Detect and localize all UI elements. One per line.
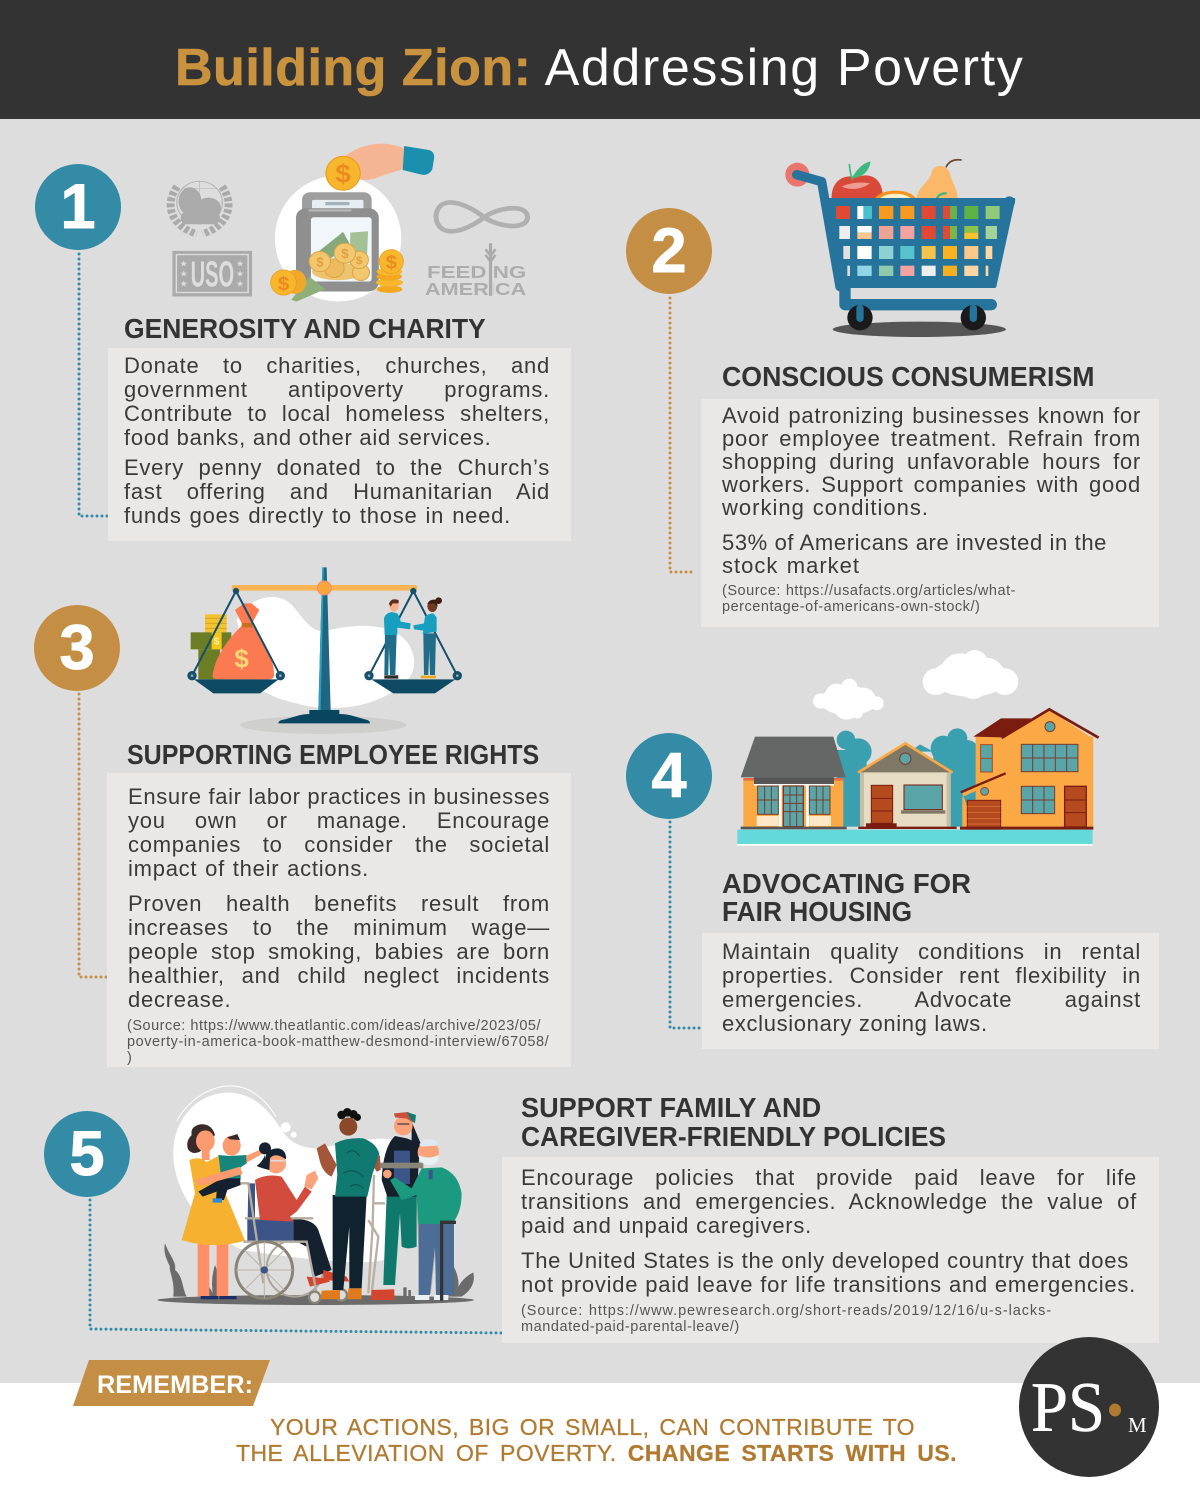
donation jar — [296, 192, 379, 292]
icon: USO logo: ★ — [180, 279, 188, 288]
scale beam — [232, 581, 417, 595]
text box 1 — [108, 348, 571, 541]
text box 1: Every penny donated to the Church’s — [124, 455, 550, 480]
icon: falling coin: $ — [335, 159, 351, 188]
text box 5: (Source: https://www.pewresearch.org/short-reads/2019/12/16/u-s-lacks- — [521, 1303, 1052, 1319]
text box 3: impact of their actions. — [128, 856, 369, 881]
logo: PS M: PS — [1031, 1369, 1105, 1447]
text box 3: ) — [127, 1050, 132, 1066]
text box 2: shopping during unfavorable hours for — [722, 449, 1141, 474]
right pan — [366, 588, 460, 693]
remember tag: REMEMBER: — [97, 1371, 253, 1399]
number badge 5 — [44, 1111, 130, 1197]
text box 3: poverty-in-america-book-matthew-desmond-interview/67058/ — [127, 1034, 549, 1050]
heading 2: CONSCIOUS CONSUMERISM — [722, 361, 1095, 392]
woman in wheelchair — [236, 1142, 349, 1303]
white blob — [237, 597, 414, 708]
header bar with title — [0, 0, 1200, 119]
text box 2: Avoid patronizing businesses known for — [722, 403, 1141, 428]
icon: feeding america logo: AMERICA — [425, 278, 526, 299]
coin stack and money: $ — [278, 273, 289, 295]
connector 1 — [78, 252, 108, 518]
text box 5: Encourage policies that provide paid leave for life — [521, 1165, 1137, 1190]
text box 2: 53% of Americans are invested in the — [722, 530, 1107, 555]
icon: USO logo — [172, 251, 252, 296]
text box 5: The United States is the only developed country that does — [521, 1248, 1129, 1273]
text box 2: poor employee treatment. Refrain from — [722, 426, 1141, 451]
text box 2: percentage-of-americans-own-stock/) — [722, 599, 980, 615]
text box 2 — [701, 399, 1159, 627]
text box 2: (Source: https://usafacts.org/articles/what- — [722, 583, 1016, 599]
text box 4: emergencies. Advocate against — [722, 987, 1141, 1012]
text box 1: Donate to charities, churches, and — [124, 353, 550, 378]
heading 5: SUPPORT FAMILY AND — [521, 1092, 821, 1123]
heading 4: ADVOCATING FOR — [722, 868, 971, 899]
text box 1: Contribute to local homeless shelters, — [124, 401, 550, 426]
panel 1: generosity and charity — [35, 144, 571, 541]
connector 2 — [668, 296, 692, 574]
remember tag — [73, 1360, 270, 1406]
footer band — [0, 1337, 1200, 1500]
house 2: cream — [858, 743, 957, 829]
heading 5 — [521, 1092, 946, 1152]
number badge 3 — [34, 605, 120, 691]
text box 3: Proven health benefits result from — [128, 891, 550, 916]
number badge 4 — [626, 733, 712, 819]
trees — [837, 728, 980, 827]
money bag — [213, 603, 274, 679]
text box 5: not provide paid leave for life transitions and emergencies. — [521, 1272, 1136, 1297]
text box 5 — [502, 1157, 1159, 1343]
text box 2: stock market — [722, 553, 860, 578]
logo: PS M — [1019, 1337, 1159, 1477]
white footer background — [0, 1383, 1200, 1500]
cart handle — [785, 163, 809, 187]
connector 3 — [78, 692, 107, 978]
text box 2: working conditions. — [722, 495, 929, 520]
money stack — [191, 614, 231, 679]
illustration: row of houses — [737, 650, 1100, 846]
woman figure — [413, 597, 442, 678]
illustration: shopping cart with food — [785, 158, 1016, 337]
text box 1: fast offering and Humanitarian Aid — [124, 479, 550, 504]
text box 3: companies to consider the societal — [128, 832, 550, 857]
number badge 2 — [626, 208, 712, 294]
icon: USO logo: ★ — [236, 279, 244, 288]
text box 3: people stop smoking, babies are born — [128, 939, 550, 964]
donation jar: $ — [356, 255, 363, 267]
crutch user — [368, 1112, 435, 1300]
logo: PS M: M — [1128, 1413, 1147, 1437]
money bag: $ — [234, 643, 249, 673]
money stack: $ — [214, 636, 220, 647]
donation jar: $ — [316, 255, 324, 269]
panel 3: supporting employee rights — [34, 567, 571, 1067]
connector 5 — [88, 1198, 502, 1334]
text box 4: Maintain quality conditions in rental — [722, 939, 1141, 964]
number badge 1: 1 — [60, 172, 96, 242]
icon: USO logo: USO — [191, 254, 234, 294]
icon: feeding america logo: FEEDING — [427, 261, 526, 282]
text box 4: properties. Consider rent flexibility in — [722, 963, 1141, 988]
number badge 1 — [35, 164, 121, 250]
text box 4: exclusionary zoning laws. — [722, 1011, 988, 1036]
panel 4: advocating for fair housing — [626, 650, 1159, 1049]
heading 1: GENEROSITY AND CHARITY — [124, 313, 486, 344]
mother with child — [182, 1124, 268, 1299]
text box 3: healthier, and child neglect incidents — [128, 963, 550, 988]
coin stack and money: $ — [386, 253, 397, 273]
ground strip — [737, 830, 1093, 846]
scale pole and base — [278, 567, 370, 723]
number badge 4: 4 — [651, 741, 687, 811]
heading 5: CAREGIVER-FRIENDLY POLICIES — [521, 1121, 946, 1152]
scale shadow — [240, 716, 407, 734]
illustration: diverse family and caregivers — [157, 1086, 474, 1305]
man in teal shirt — [317, 1108, 381, 1299]
text box 3: (Source: https://www.theatlantic.com/ideas/archive/2023/05/ — [127, 1018, 541, 1034]
fruit — [832, 160, 962, 199]
text box 3 — [107, 773, 571, 1067]
closing message: YOUR ACTIONS, BIG OR SMALL, CAN CONTRIBUTE TO — [270, 1414, 915, 1440]
ground and plants — [157, 1243, 474, 1305]
icon: USO logo: ★ — [236, 259, 244, 268]
icon: USO logo: ★ — [180, 269, 188, 278]
illustration: balance scale with money and handshake — [187, 567, 462, 734]
clouds — [813, 650, 1018, 720]
cart shadow — [833, 322, 1006, 337]
text box 5: transitions and emergencies. Acknowledge the value of — [521, 1189, 1137, 1214]
left pan — [189, 588, 283, 693]
connector 4 — [668, 820, 700, 1030]
icon: cuff — [403, 146, 434, 175]
text box 3: Ensure fair labor practices in businesses — [128, 784, 550, 809]
illustration: charity logos and donation jar — [166, 144, 530, 302]
text box 5: mandated-paid-parental-leave/) — [521, 1319, 740, 1335]
donation jar: $ — [341, 246, 349, 261]
text box 3: increases to the minimum wage— — [128, 915, 550, 940]
text box 1: funds goes directly to those in need. — [124, 503, 511, 528]
icon: USO logo: ★ — [236, 269, 244, 278]
man figure — [384, 599, 411, 679]
text box 2: workers. Support companies with good — [722, 472, 1141, 497]
number badge 3: 3 — [59, 613, 95, 683]
house 3: two-storey orange — [960, 709, 1099, 830]
closing message: THE ALLEVIATION OF POVERTY. CHANGE STARTS WITH US. — [236, 1440, 957, 1466]
house 1: gray roof — [741, 737, 847, 829]
closing message — [236, 1414, 957, 1466]
icon: falling coin — [326, 156, 360, 190]
older man with cane — [383, 1139, 462, 1301]
icon: hand — [345, 144, 404, 180]
thought blob — [173, 1086, 400, 1262]
icon: UN emblem — [171, 181, 229, 234]
text box 5: paid and unpaid caregivers. — [521, 1213, 812, 1238]
white circle behind jar — [275, 176, 401, 301]
icon: feeding america logo — [425, 202, 528, 299]
heading 4 — [722, 868, 971, 927]
cart basket — [797, 175, 1015, 287]
text box 1: food banks, and other aid services. — [124, 425, 491, 450]
text box 3: you own or manage. Encourage — [128, 808, 550, 833]
icon: USO logo: ★ — [180, 259, 188, 268]
cart base and wheels — [845, 287, 991, 330]
text box 4 — [702, 933, 1159, 1049]
heading 4: FAIR HOUSING — [722, 896, 912, 927]
title: Building Zion: Addressing Poverty — [175, 39, 1024, 97]
text box 3: decrease. — [128, 987, 231, 1012]
panel 5: family and caregiver-friendly policies — [44, 1086, 1159, 1343]
text box 1: government antipoverty programs. — [124, 377, 550, 402]
number badge 2: 2 — [651, 216, 687, 286]
panel 2: conscious consumerism — [626, 158, 1159, 627]
number badge 5: 5 — [69, 1119, 105, 1189]
coin stack and money — [271, 250, 403, 301]
heading 3: SUPPORTING EMPLOYEE RIGHTS — [127, 739, 539, 770]
